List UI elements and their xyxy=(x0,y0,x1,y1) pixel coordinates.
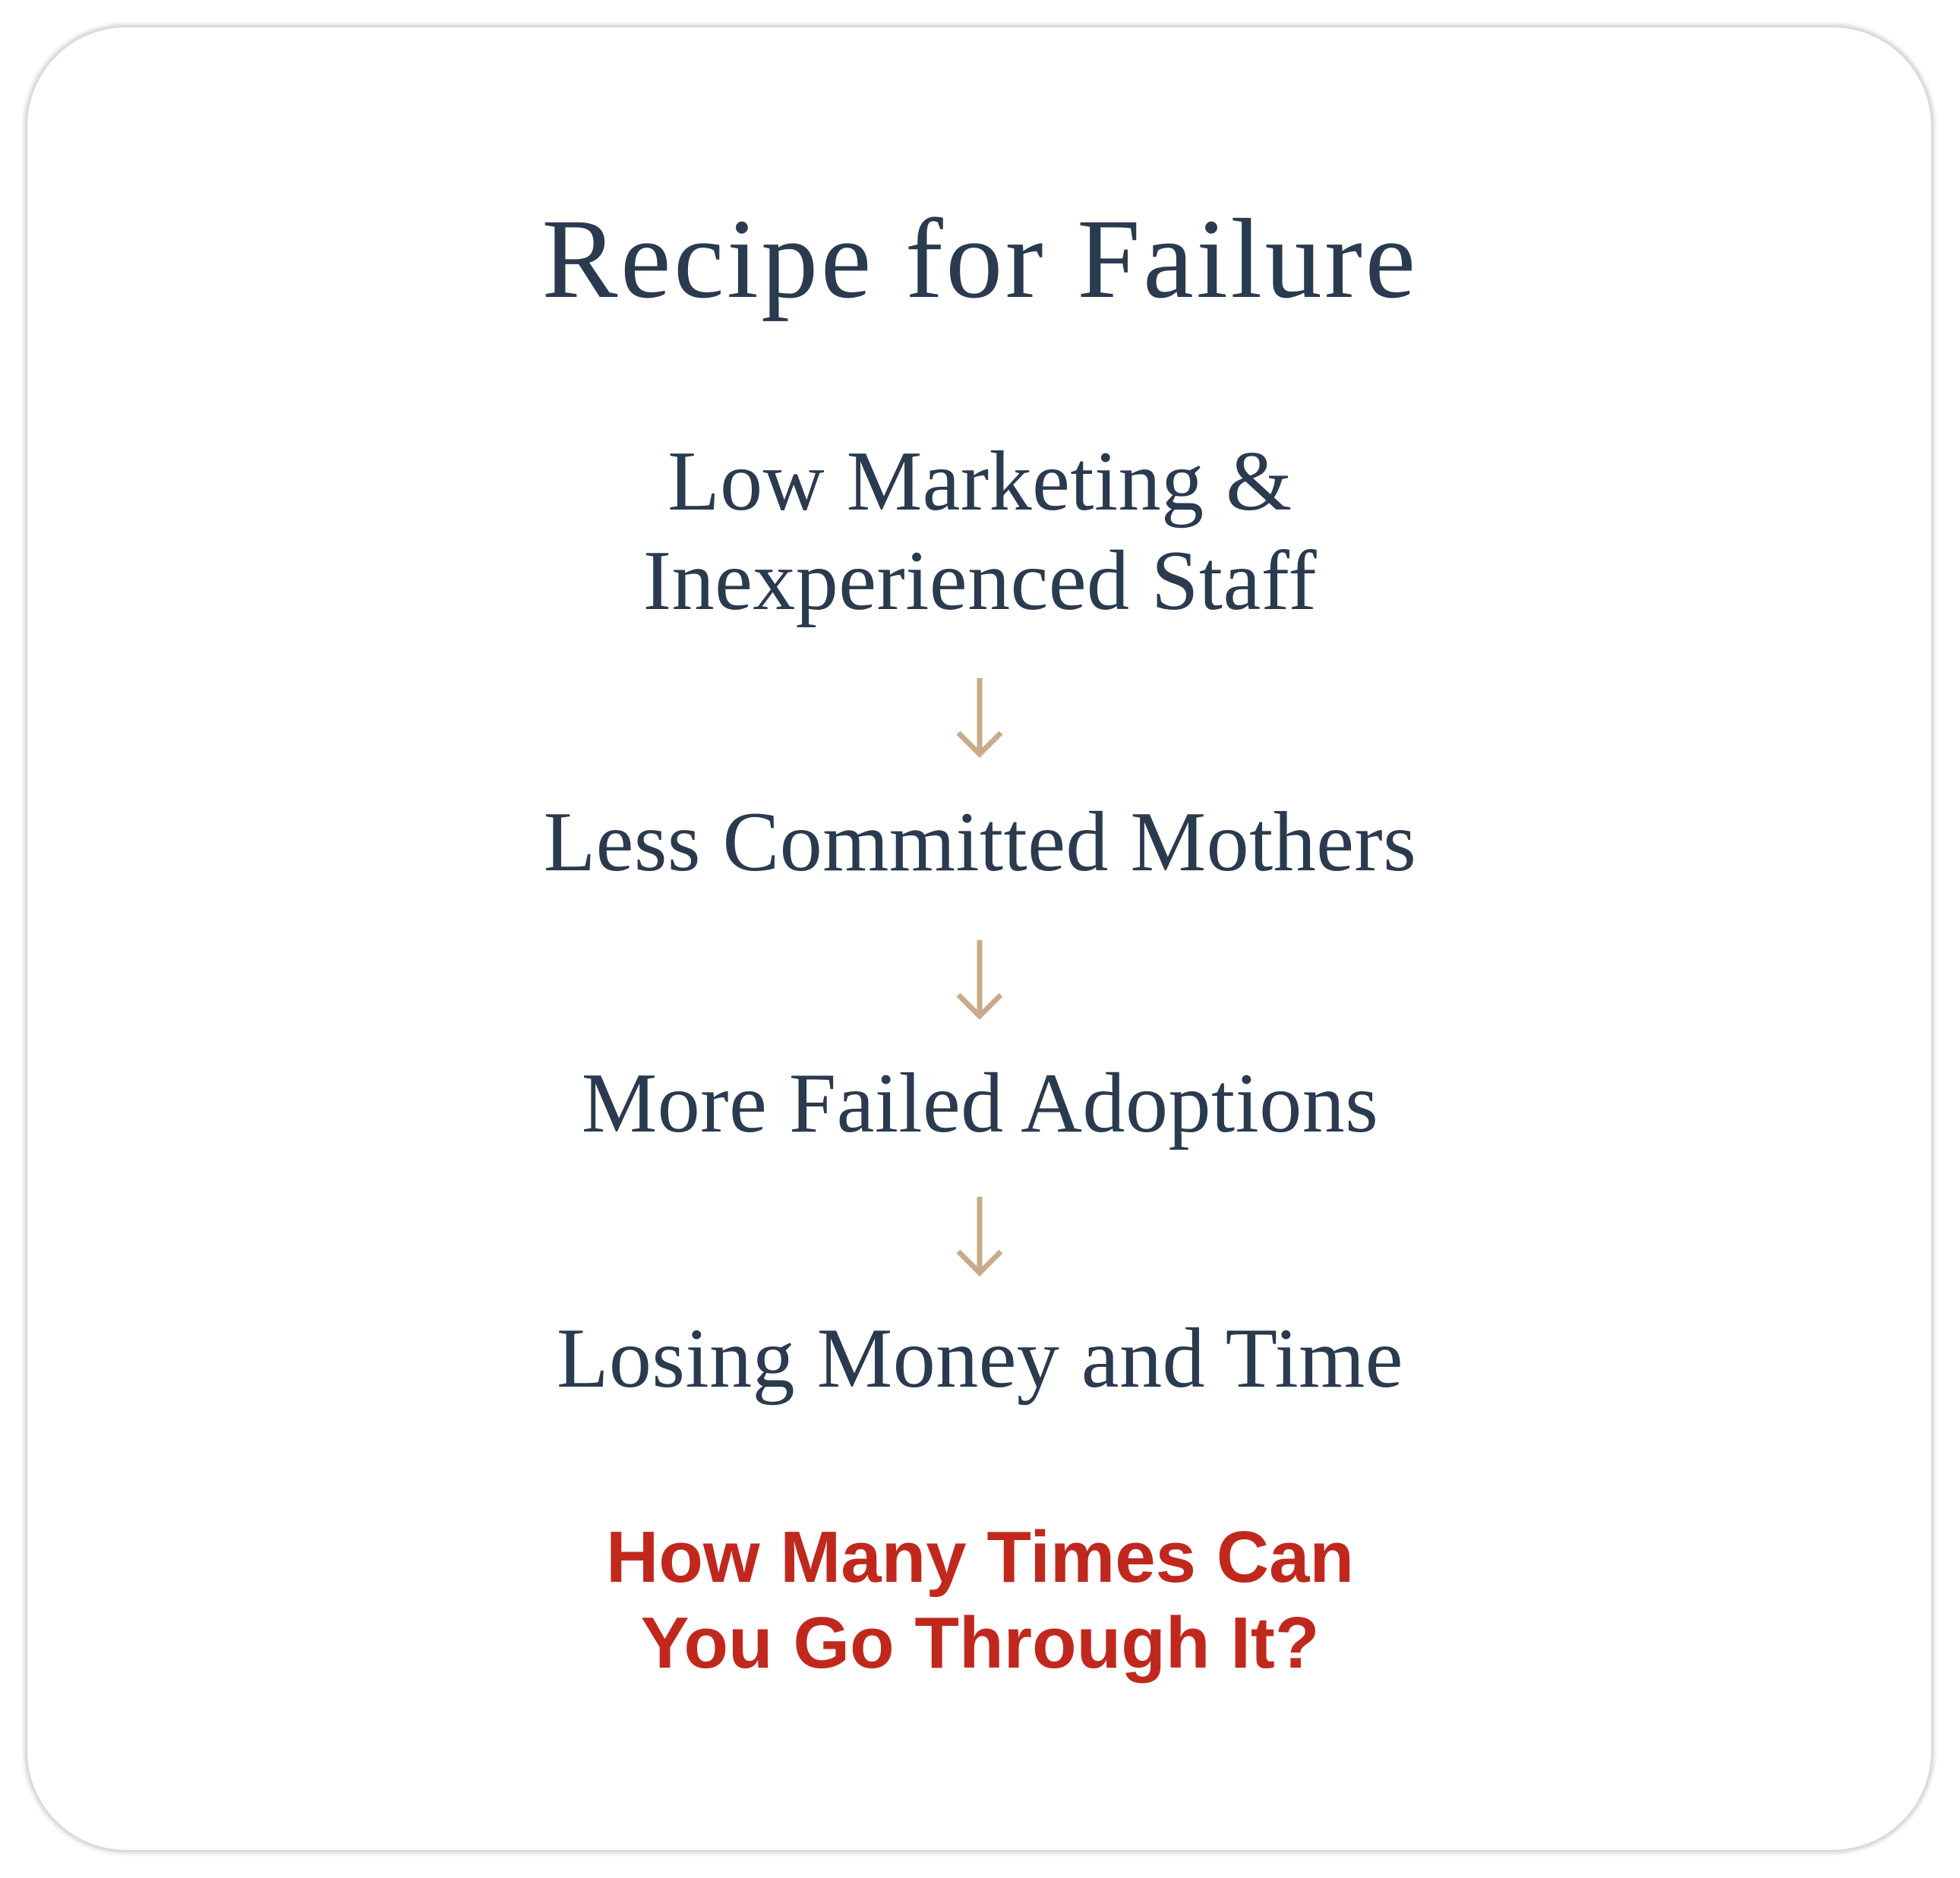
step 1 text: Low Marketing & xyxy=(668,434,1292,529)
arrow 1 xyxy=(957,678,1002,758)
callout: red question xyxy=(606,1517,1354,1684)
step 2 text: Less Committed Mothers xyxy=(544,795,1416,889)
arrow 2 xyxy=(957,940,1002,1020)
callout: red question: How Many Times Can xyxy=(606,1517,1354,1598)
arrow 3 xyxy=(957,1197,1002,1277)
step 1 text: Inexperienced Staff xyxy=(643,534,1317,628)
step 4 text: Losing Money and Time xyxy=(557,1311,1403,1406)
callout: red question: You Go Through It? xyxy=(641,1602,1320,1684)
title: Recipe for Failure xyxy=(541,196,1419,322)
step 1 text xyxy=(643,434,1317,628)
step 3 text: More Failed Adoptions xyxy=(582,1056,1378,1150)
